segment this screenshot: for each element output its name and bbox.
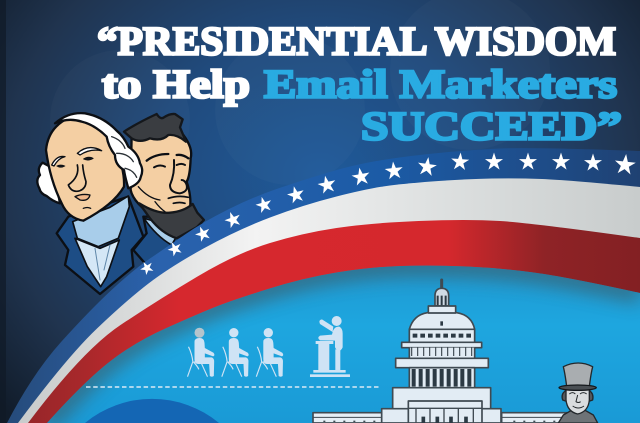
audience icons	[188, 328, 283, 377]
drum side lines	[409, 348, 475, 359]
stars	[138, 152, 637, 276]
drum windows	[413, 330, 471, 342]
white band	[18, 178, 640, 423]
dark blue circle	[85, 399, 219, 423]
drum upper	[409, 329, 475, 343]
ledge lower	[396, 358, 488, 368]
seated person 1	[188, 328, 214, 377]
portico	[408, 401, 482, 423]
portraits: Washington and Lincoln	[37, 113, 207, 294]
lantern base	[428, 306, 456, 313]
title line 3: SUCCEED”	[361, 104, 622, 148]
base block	[393, 388, 491, 409]
lantern	[435, 288, 449, 306]
speaker at podium icon	[310, 316, 350, 377]
Lincoln	[124, 114, 207, 277]
hat brim	[559, 385, 596, 390]
sky panel	[47, 266, 640, 423]
portico doors	[423, 417, 466, 423]
ledge upper	[402, 342, 482, 348]
left wing	[313, 413, 382, 423]
hat crown	[563, 363, 593, 387]
colonnade	[409, 368, 475, 388]
title line 2 white: to Help	[102, 62, 250, 106]
blue band	[7, 148, 640, 423]
drum slits	[412, 347, 472, 356]
title line 1: “PRESIDENTIAL WISDOM	[97, 18, 616, 64]
side pavilions	[382, 409, 501, 423]
coat	[558, 409, 598, 423]
dome window	[440, 321, 443, 326]
dashed divider	[86, 386, 380, 388]
capitol building	[313, 280, 567, 423]
drum lower	[409, 348, 475, 359]
red band	[28, 220, 640, 423]
small Lincoln figure with top hat	[558, 363, 598, 423]
hair	[562, 391, 593, 402]
wing windows	[323, 419, 555, 423]
right wing	[502, 413, 567, 423]
title	[97, 18, 622, 148]
wing roof lines	[313, 416, 567, 419]
seated person 3	[256, 328, 283, 377]
tricolour swoosh	[7, 148, 640, 423]
portico inner line	[408, 408, 482, 423]
face	[566, 388, 589, 414]
colonnade columns	[414, 369, 469, 387]
spire	[437, 280, 446, 288]
facial features	[569, 393, 587, 408]
dome	[409, 313, 475, 329]
Washington	[37, 113, 143, 294]
title line 2 blue: Email Marketers	[264, 62, 617, 106]
seated person 2	[222, 328, 249, 377]
lantern slots	[438, 296, 446, 306]
